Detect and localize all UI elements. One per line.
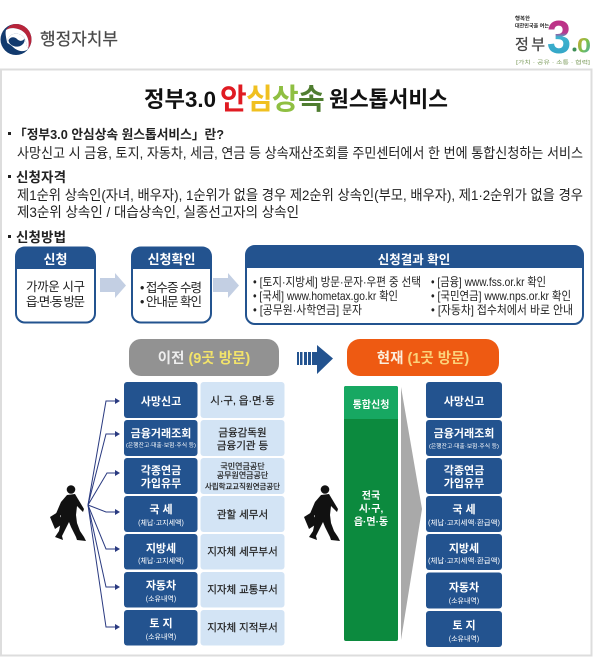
now: result boxes: (소유내역) — [449, 596, 479, 605]
text block: service definition — [8, 127, 583, 161]
now: result boxes: (은행잔고·대출·보험·주식 등) — [429, 442, 499, 450]
logo: government 3.0: [가치 · 공유 · 소통 · 협력] — [516, 59, 591, 66]
step 1: apply: 읍·면·동 방문 — [26, 295, 85, 309]
before: task boxes: 가입유무 — [141, 476, 181, 490]
title — [144, 83, 448, 116]
text block: eligibility — [8, 170, 583, 220]
before: task boxes — [124, 382, 198, 646]
green column: integrated application — [344, 386, 398, 641]
before: task boxes: 사망신고 — [141, 395, 181, 408]
pill: now, 1 visit — [347, 339, 499, 376]
step 3: check results: • [국민연금] www.nps.or.kr 확인 — [431, 289, 571, 303]
logo: ministry emblem and name: 행정자치부 — [40, 30, 118, 49]
before: task boxes: 지방세 — [146, 542, 176, 555]
title: 속 — [298, 84, 325, 116]
before: agency boxes — [200, 382, 284, 646]
green column: integrated application: 전국 — [362, 490, 380, 502]
title: 안 — [220, 83, 247, 116]
before: agency boxes: 국민연금공단 — [220, 461, 265, 471]
step 3: check results: • [금융] www.fss.or.kr 확인 — [431, 275, 546, 289]
now: result boxes: 금융거래조회 — [434, 426, 494, 440]
step 3: check results — [246, 246, 583, 324]
before: task boxes: (체납·고지세액) — [138, 518, 184, 527]
logo: government 3.0: 3 — [547, 11, 571, 63]
step 3: check results: • [국세] www.hometax.go.kr 확인 — [253, 289, 398, 303]
before: agency boxes: 금융기관 등 — [217, 440, 268, 452]
now: result boxes: 가입유무 — [444, 476, 484, 490]
logo: government 3.0: 정부 — [515, 36, 545, 54]
now: result boxes: 사망신고 — [444, 395, 484, 408]
gray wedge arrow — [401, 387, 422, 640]
arrows: person to each office — [88, 401, 119, 627]
pill: before, 9 visits: 이전 (9곳 방문) — [158, 350, 250, 367]
step 3: check results: • [자동차] 접수처에서 바로 안내 — [431, 303, 573, 317]
arrow: step 2 to 3 — [213, 273, 239, 298]
pill: now, 1 visit: 현재 (1곳 방문) — [377, 350, 469, 367]
title: 정부3.0 — [144, 87, 216, 112]
logo: government 3.0: 행복한 — [515, 15, 530, 22]
before: task boxes: (소유내역) — [146, 594, 176, 603]
heading: application method: 신청방법 — [16, 230, 66, 245]
before: task boxes: (소유내역) — [146, 632, 176, 641]
before: task boxes: 금융거래조회 — [131, 426, 191, 440]
text block: eligibility: 제3순위 상속인 / 대습상속인, 실종선고자의 상속인 — [17, 204, 299, 220]
text block: eligibility: 신청자격 — [16, 170, 66, 185]
step 3: check results: • [공무원·사학연금] 문자 — [253, 303, 362, 317]
now: result boxes: 지방세 — [449, 542, 479, 555]
step 3: check results: • [토지·지방세] 방문·문자·우편 중 선택 — [253, 275, 421, 289]
now: result boxes — [426, 382, 502, 647]
before: task boxes: 자동차 — [146, 579, 176, 592]
step 1: apply — [16, 248, 95, 322]
step 1: apply: 신청 — [44, 252, 67, 267]
logo: government 3.0: 대한민국을 여는 — [515, 22, 549, 30]
before: agency boxes: 지자체 세무부서 — [207, 546, 278, 558]
title: 원스톱서비스 — [329, 87, 448, 112]
before: agency boxes: 사립학교교직원연금공단 — [205, 481, 280, 491]
logo: government 3.0: 0 — [577, 34, 591, 58]
before: agency boxes: 지자체 교통부서 — [207, 584, 278, 596]
before: task boxes: 국 세 — [149, 503, 173, 516]
step 2: confirm application: 신청확인 — [148, 252, 195, 267]
text block: eligibility: 제1순위 상속인(자녀, 배우자), 1순위가 없을 경우 제2순위 상속인(부모, 배우자), 제1·2순위가 없을 경우 — [17, 187, 583, 203]
now: result boxes: (체납·고지세액·환급액) — [428, 556, 500, 565]
arrow: before to now — [297, 345, 333, 374]
before: agency boxes: 시·구, 읍·면·동 — [210, 395, 275, 407]
step 1: apply: 가까운 시구 — [26, 280, 85, 294]
now: result boxes: 국 세 — [452, 503, 476, 516]
now: result boxes: 토 지 — [452, 619, 476, 632]
before: agency boxes: 지자체 지적부서 — [207, 622, 278, 634]
before: task boxes: 토 지 — [149, 617, 173, 630]
now: result boxes: (체납·고지세액·환급액) — [428, 518, 500, 527]
logo: government 3.0 — [515, 11, 591, 66]
before: task boxes: (은행잔고·대출·보험·주식 등) — [126, 441, 196, 449]
step 3: check results: 신청결과 확인 — [378, 252, 450, 267]
pill: before, 9 visits — [129, 339, 279, 376]
before: agency boxes: 공무원연금공단 — [217, 470, 269, 480]
text block: service definition: 「정부3.0 안심상속 원스톱서비스」란? — [14, 127, 224, 142]
now: result boxes: 자동차 — [449, 581, 479, 594]
before: task boxes: 각종연금 — [141, 464, 181, 477]
step 2: confirm application: • 안내문 확인 — [140, 295, 202, 309]
before: task boxes: (체납·고지세액) — [138, 556, 184, 565]
step 2: confirm application: • 접수증 수령 — [140, 281, 202, 295]
title: 심 — [246, 83, 273, 116]
now: result boxes: (소유내역) — [449, 634, 479, 643]
icon: walking man, now — [304, 485, 340, 541]
now: result boxes: 각종연금 — [444, 464, 484, 477]
logo: ministry emblem and name — [0, 24, 118, 55]
green column: integrated application: 통합신청 — [353, 398, 389, 411]
title: 상 — [272, 83, 299, 116]
before: agency boxes: 관할 세무서 — [217, 509, 268, 521]
before: agency boxes: 금융감독원 — [218, 427, 267, 439]
arrow: step 1 to 2 — [100, 273, 126, 298]
green column: integrated application: 읍·면·동 — [354, 516, 388, 528]
step 2: confirm application — [132, 248, 211, 322]
icon: walking man, before — [50, 485, 86, 541]
green column: integrated application: 시·구, — [359, 503, 383, 515]
